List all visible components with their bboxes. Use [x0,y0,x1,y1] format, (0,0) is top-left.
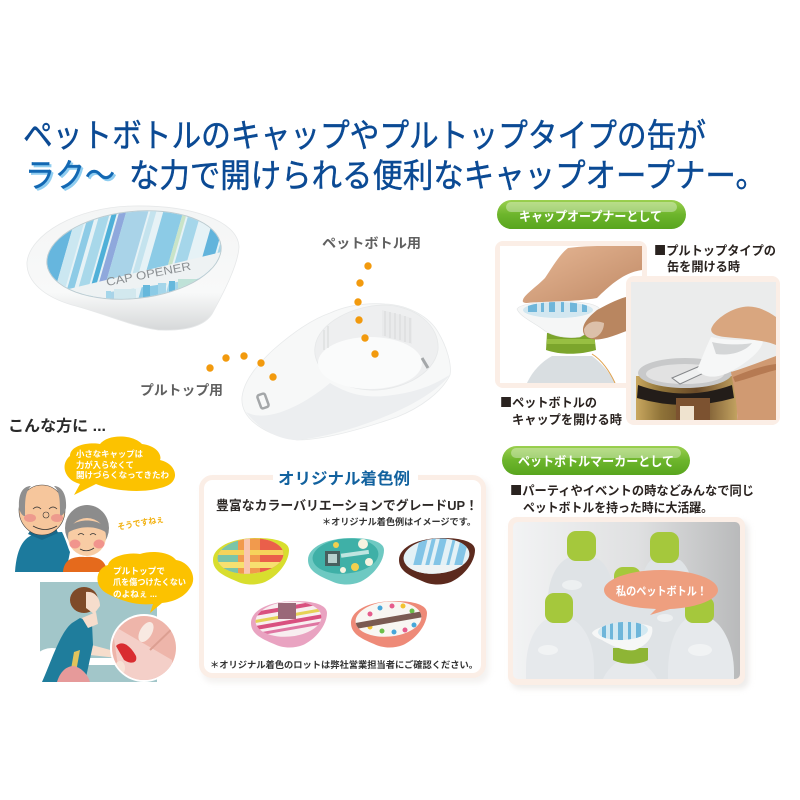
yellow opener [213,536,289,585]
caption: pet bottle cap: ■ペットボトルの [500,392,597,411]
speech bubble 1: 小さなキャップは [76,448,143,459]
panel footnote: ＊オリジナル着色のロットは弊社営業担当者にご確認ください。 [210,659,478,670]
front caps [545,593,573,623]
speech bubble 2: 爪を傷つけたくない [113,576,186,587]
product label text: CAP OPENER [105,261,192,289]
coral opener [351,599,427,648]
title line 1: ペットボトルのキャップやプルトップタイプの缶が [23,117,706,154]
dotted arrow: pet bottle [354,262,379,358]
speech bubble 2: プルトップで [113,566,165,576]
product photo: opener top view [19,200,241,330]
bottle highlights [538,580,712,656]
label: pull-top use: プルトップ用 [140,383,223,398]
back bottles [548,558,694,679]
pill heading: as a cap opener [497,200,686,229]
speech bubble 1: 開けづらくなってきたわ [76,469,169,480]
caption: pull-top can [654,240,776,274]
dotted arrow: pull-top [206,352,277,381]
speech bubble 1 [65,436,175,495]
speech bubble 2: のよねぇ ... [113,589,157,599]
product photo: opener underside [242,304,450,440]
panel heading [273,466,418,488]
title line 2: な力で開けられる便利なキャップオープナー。 [129,157,766,194]
illustration: elderly couple [15,485,109,572]
pill heading: as a pet bottle marker: ペットボトルマーカーとして [518,454,674,469]
speech bubble 1: 力が入らなくて [76,459,134,470]
panel subheading: 豊富なカラーバリエーションでグレードUP！ [216,498,478,513]
illustration: woman with nails [40,582,176,682]
title line 2: ラク～ [25,157,115,194]
heading: for people like this: こんな方に ... [8,416,106,435]
speech bubble 2 [97,552,193,613]
green cap [546,333,596,354]
opener [697,337,763,377]
caption: pet bottle cap [500,392,622,427]
caption: party use: ペットボトルを持った時に大活躍。 [523,500,713,515]
caption: pull-top can: ■プルトップタイプの [654,240,776,259]
hand [523,246,642,303]
lower fingers [731,356,776,420]
photo panel: opening a pull-top can [626,276,780,425]
upper hand [711,307,776,345]
title line 2: ラク～ [27,159,117,196]
small remark: そうですねぇ [117,514,165,532]
panel heading: オリジナル着色例 [278,469,410,488]
panel: original colour examples [202,466,489,683]
label: pet bottle use: ペットボトル用 [322,236,421,251]
can [636,376,737,420]
brown opener [399,536,475,585]
pink opener [251,599,327,648]
opener [517,301,599,338]
caption: pet bottle cap: キャップを開ける時 [512,412,622,427]
teal opener [308,536,384,585]
back caps [567,531,596,561]
photo panel: opening a bottle cap [495,241,647,388]
pill heading: as a cap opener: キャップオープナーとして [519,209,662,224]
caption: party use: ■パーティやイベントの時などみんなで同じ [510,480,754,499]
pill heading: as a pet bottle marker [502,446,690,475]
speech bubble: my bottle: 私のペットボトル！ [616,584,707,598]
title [23,117,766,196]
panel note: ＊オリジナル着色例はイメージです。 [322,516,476,527]
front bottles [526,619,734,679]
speech bubble: my bottle [604,570,718,615]
bottle [527,356,615,383]
photo panel: bottles [508,517,749,689]
caption: party use [510,480,754,515]
mini opener on bottle [592,623,652,650]
caption: pull-top can: 缶を開ける時 [667,259,740,274]
